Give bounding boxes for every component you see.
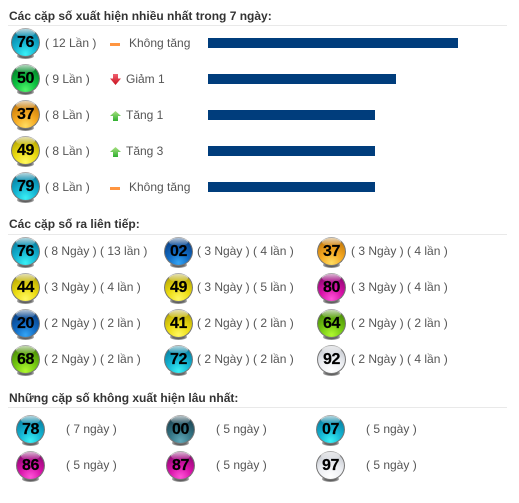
- label 07: ( 5 ngày ): [366, 422, 417, 436]
- bar 8: [208, 110, 375, 120]
- label 68: ( 2 Ngày ) ( 2 lần ): [44, 352, 141, 366]
- ball 68: [11, 345, 40, 376]
- ball 78: 78: [22, 421, 39, 438]
- icon: green up arrow: [110, 147, 121, 157]
- ball 78: [16, 415, 45, 446]
- ball 79: [11, 172, 40, 203]
- ball 50: [11, 64, 40, 95]
- ball 44: [11, 273, 40, 304]
- ball 49: 49: [170, 279, 187, 296]
- ball 72: [164, 345, 193, 376]
- label 86: ( 5 ngày ): [66, 458, 117, 472]
- ball 97: [316, 451, 345, 482]
- ball 44: 44: [17, 279, 34, 296]
- label 64: ( 2 Ngày ) ( 2 lần ): [351, 316, 448, 330]
- ball 37: [11, 100, 40, 131]
- count text: ( 9 Lần ): [45, 72, 90, 86]
- ball 50: 50: [17, 70, 34, 87]
- ball 37: 37: [17, 106, 34, 123]
- ball 00: [166, 415, 195, 446]
- label 49: ( 3 Ngày ) ( 5 lần ): [197, 280, 294, 294]
- ball 20: [11, 309, 40, 340]
- count text: ( 8 Lần ): [45, 180, 90, 194]
- trend text: Không tăng: [129, 36, 190, 50]
- label 44: ( 3 Ngày ) ( 4 lần ): [44, 280, 141, 294]
- ball 07: [316, 415, 345, 446]
- heading: longest absent pairs: Những cặp số không xuất hiện lâu nhất:: [9, 391, 238, 405]
- row: 79 most frequent: [11, 172, 375, 203]
- trend text: Không tăng: [129, 180, 190, 194]
- label 02: ( 3 Ngày ) ( 4 lần ): [197, 244, 294, 258]
- ball 86: 86: [22, 457, 39, 474]
- row: 50 most frequent: [11, 64, 396, 95]
- label 20: ( 2 Ngày ) ( 2 lần ): [44, 316, 141, 330]
- ball 37: 37: [323, 243, 340, 260]
- ball 92: [317, 345, 346, 376]
- bar 12: [208, 38, 458, 48]
- trend text: Tăng 3: [126, 144, 163, 158]
- ball 68: 68: [17, 351, 34, 368]
- ball 41: [164, 309, 193, 340]
- trend text: Tăng 1: [126, 108, 163, 122]
- label 92: ( 2 Ngày ) ( 4 lần ): [351, 352, 448, 366]
- ball 87: 87: [172, 457, 189, 474]
- heading: most frequent pairs: Các cặp số xuất hiện nhiều nhất trong 7 ngày:: [9, 9, 272, 23]
- ball 20: 20: [17, 315, 34, 332]
- label 72: ( 2 Ngày ) ( 2 lần ): [197, 352, 294, 366]
- ball 72: 72: [170, 351, 187, 368]
- ball 00: 00: [172, 421, 189, 438]
- ball 07: 07: [322, 421, 339, 438]
- ball 92: 92: [323, 351, 340, 368]
- ball 49: [11, 136, 40, 167]
- icon: no change dash: [110, 187, 120, 190]
- ball 76: 76: [17, 34, 34, 51]
- count text: ( 12 Lần ): [45, 36, 96, 50]
- icon: no change dash: [110, 43, 120, 46]
- ball 49: [164, 273, 193, 304]
- ball 41: 41: [170, 315, 187, 332]
- icon: red down arrow: [110, 74, 121, 85]
- label 76: ( 8 Ngày ) ( 13 lần ): [44, 244, 147, 258]
- ball 87: [166, 451, 195, 482]
- label 87: ( 5 ngày ): [216, 458, 267, 472]
- ball 80: 80: [323, 279, 340, 296]
- bar 8: [208, 146, 375, 156]
- trend text: Giảm 1: [126, 72, 165, 86]
- ball 76: [11, 237, 40, 268]
- bar 9: [208, 74, 396, 84]
- label 37: ( 3 Ngày ) ( 4 lần ): [351, 244, 448, 258]
- label 78: ( 7 ngày ): [66, 422, 117, 436]
- heading: consecutive pairs: Các cặp số ra liên tiếp:: [9, 217, 140, 231]
- row: 37 most frequent: [11, 100, 375, 131]
- ball 86: [16, 451, 45, 482]
- ball 76: [11, 28, 40, 59]
- ball 64: 64: [323, 315, 340, 332]
- ball 37: [317, 237, 346, 268]
- row: 49 most frequent: [11, 136, 375, 167]
- ball 79: 79: [17, 178, 34, 195]
- ball 97: 97: [322, 457, 339, 474]
- ball 02: [164, 237, 193, 268]
- count text: ( 8 Lần ): [45, 108, 90, 122]
- label 80: ( 3 Ngày ) ( 4 lần ): [351, 280, 448, 294]
- ball 80: [317, 273, 346, 304]
- count text: ( 8 Lần ): [45, 144, 90, 158]
- label 00: ( 5 ngày ): [216, 422, 267, 436]
- ball 02: 02: [170, 243, 187, 260]
- row: 76 most frequent: [11, 28, 458, 59]
- ball 64: [317, 309, 346, 340]
- icon: green up arrow: [110, 111, 121, 121]
- label 97: ( 5 ngày ): [366, 458, 417, 472]
- bar 8: [208, 182, 375, 192]
- ball 49: 49: [17, 142, 34, 159]
- ball 76: 76: [17, 243, 34, 260]
- label 41: ( 2 Ngày ) ( 2 lần ): [197, 316, 294, 330]
